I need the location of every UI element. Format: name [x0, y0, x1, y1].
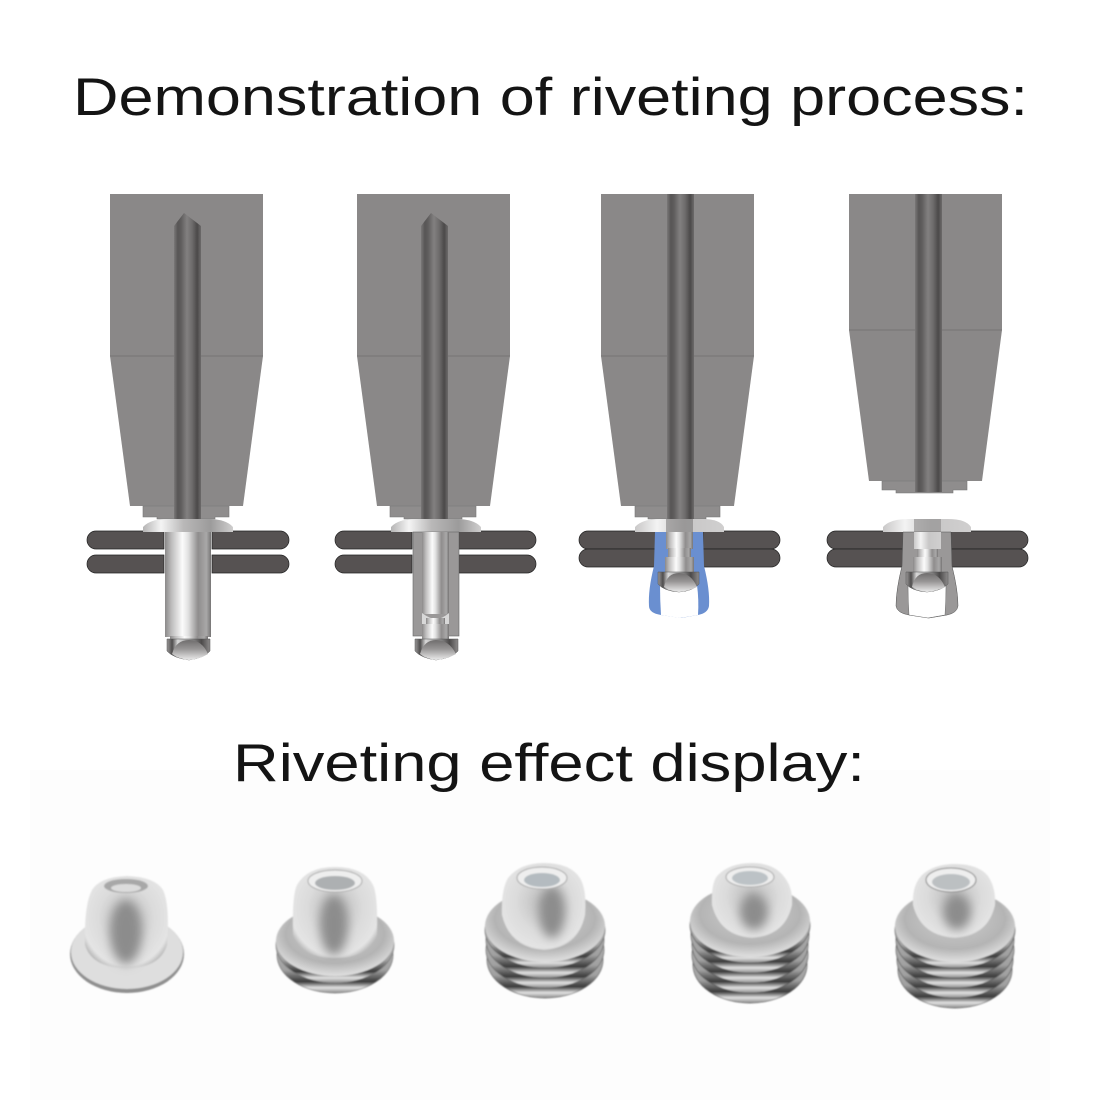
sheet plates — [335, 531, 536, 573]
rivet flange — [391, 519, 481, 532]
rivet body — [165, 532, 211, 637]
sleeve cavity — [908, 585, 946, 618]
sleeve cavity — [660, 585, 698, 618]
riveting tool — [110, 194, 263, 520]
sheet plates — [87, 531, 289, 573]
rivet sleeve section — [413, 532, 459, 636]
title: riveting effect: Riveting effect display: — [233, 734, 865, 793]
set sleeve in gray — [896, 532, 958, 618]
title: riveting process: Demonstration of riveting process: — [73, 68, 1028, 127]
sheet plates — [827, 531, 1028, 567]
deforming sleeve in blue — [649, 532, 709, 618]
riveting tool — [601, 194, 754, 520]
photo: three sheets — [485, 863, 605, 998]
photo: four sheets — [690, 863, 810, 1003]
mandrel — [658, 532, 699, 592]
rivet flange — [143, 519, 233, 532]
step 2: rivet cross-section — [335, 194, 536, 660]
rivet flange — [883, 519, 971, 532]
riveting tool — [849, 194, 1002, 493]
mandrel head — [906, 549, 948, 592]
photo: two sheets — [276, 867, 394, 993]
rivet flange — [635, 519, 724, 532]
riveting tool — [357, 194, 510, 520]
sheet plates — [579, 531, 780, 567]
step 3: mandrel pulled, sleeve deforming — [579, 194, 780, 618]
mandrel — [415, 532, 458, 660]
photo: five sheets — [895, 864, 1015, 1008]
mandrel head — [167, 636, 210, 660]
step 1: rivet inserted in tool — [87, 194, 289, 660]
photo: one sheet — [70, 876, 184, 993]
step 4: rivet set, tool lifted — [827, 194, 1028, 618]
